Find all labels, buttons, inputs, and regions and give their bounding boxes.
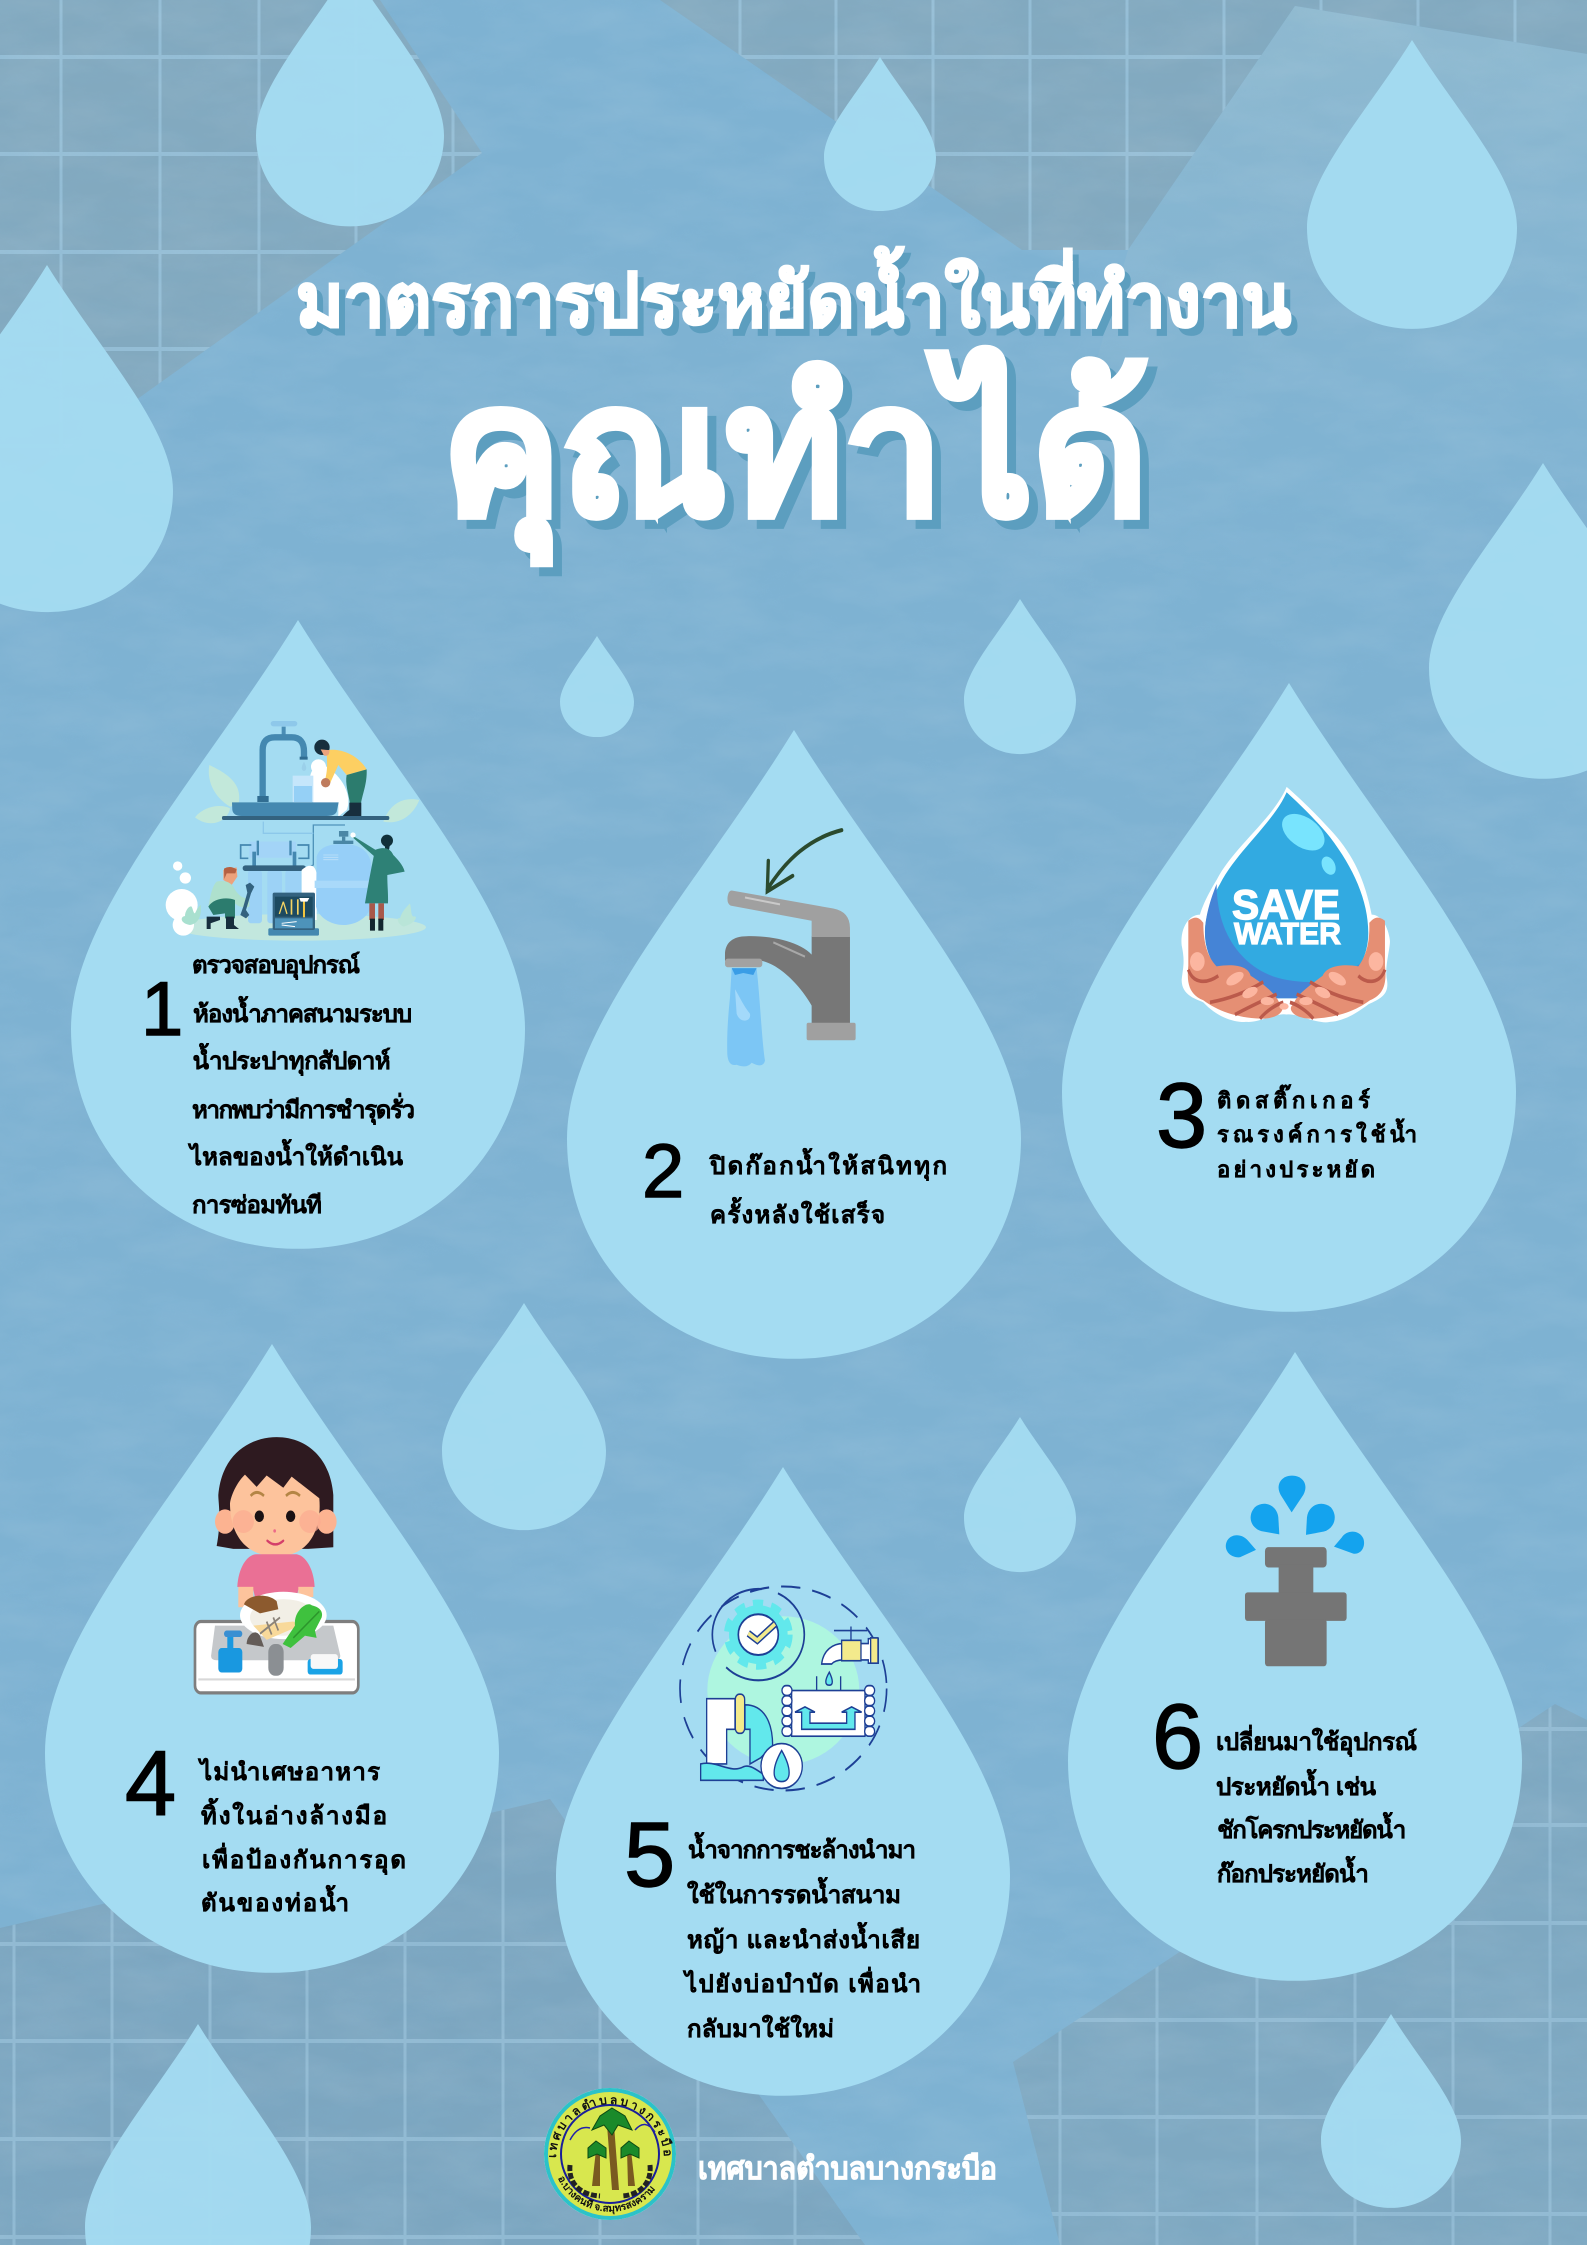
step text: เพื่อป้องกันการอุด xyxy=(202,1842,406,1876)
step text: หญ้า และนำส่งน้ำเสีย xyxy=(687,1921,920,1954)
step text: กลับมาใช้ใหม่ xyxy=(687,2014,834,2043)
icon: faucet with arrow xyxy=(725,830,856,1066)
title xyxy=(296,246,1297,573)
step text: ไปยังบ่อบำบัด เพื่อนำ xyxy=(682,1966,921,1998)
step number: 3 xyxy=(1156,1065,1207,1167)
title: คุณทำได้ xyxy=(442,348,1148,564)
step text: ติดสติ๊กเกอร์ xyxy=(1217,1084,1370,1113)
step text: ทิ้งในอ่างล้างมือ xyxy=(201,1797,387,1830)
step number: 5 xyxy=(624,1804,675,1906)
step text: ตันของท่อน้ำ xyxy=(201,1884,349,1917)
step text: น้ำจากการชะล้างนำมา xyxy=(688,1831,916,1864)
step number: 1 xyxy=(141,967,183,1052)
logo: municipality seal xyxy=(544,2060,716,2220)
step text: ประหยัดน้ำ เช่น xyxy=(1216,1768,1377,1801)
step text: รณรงค์การใช้น้ำ xyxy=(1217,1118,1417,1147)
step text: ใช้ในการรดน้ำสนาม xyxy=(687,1876,901,1909)
step text xyxy=(682,1831,921,2043)
icon: save water drop in hands: SAVE xyxy=(1232,881,1340,928)
footer organisation name: เทศบาลตำบลบางกระบือ xyxy=(698,2151,997,2186)
step text: ห้องน้ำภาคสนามระบบ xyxy=(193,995,412,1028)
step text: ครั้งหลังใช้เสร็จ xyxy=(710,1196,885,1229)
step text: ตรวจสอบอุปกรณ์ xyxy=(192,951,360,981)
panel: step 3 xyxy=(1062,683,1516,1312)
icon: girl washing dishes xyxy=(195,1437,358,1693)
step text: เปลี่ยนมาใช้อุปกรณ์ xyxy=(1216,1724,1417,1758)
panel: step 6 xyxy=(1068,1352,1522,1981)
step text xyxy=(197,1757,406,1917)
icon: save water drop in hands xyxy=(1181,787,1390,1022)
step text xyxy=(709,1147,947,1229)
icon: save water drop in hands: WATER xyxy=(1234,916,1341,951)
panel: step 5 xyxy=(556,1467,1010,2096)
logo: municipality seal: เทศบาลตำบลบางกระบือ xyxy=(549,2060,716,2198)
title: มาตรการประหยัดน้ำในที่ทำงาน xyxy=(296,246,1291,342)
panel: step 2 xyxy=(567,730,1021,1359)
step text: น้ำประปาทุกสัปดาห์ xyxy=(193,1042,391,1077)
step text: ก๊อกประหยัดน้ำ xyxy=(1217,1855,1369,1888)
step text: ชักโครกประหยัดน้ำ xyxy=(1217,1811,1406,1844)
icon: water saving sprinkler xyxy=(1226,1476,1364,1666)
icon: water recycling xyxy=(680,1586,887,1790)
step text: การซ่อมทันที xyxy=(192,1192,322,1219)
step text xyxy=(1216,1724,1417,1888)
step text xyxy=(187,951,415,1219)
step number: 6 xyxy=(1152,1686,1203,1788)
step number: 2 xyxy=(642,1129,684,1214)
icon: plumbers fixing water system xyxy=(166,721,426,941)
step text: ไหลของน้ำให้ดำเนิน xyxy=(187,1138,404,1171)
step text: ไม่นำเศษอาหาร xyxy=(197,1757,380,1786)
panel: step 1 xyxy=(71,620,525,1249)
panel: step 4 xyxy=(45,1344,499,1973)
step text xyxy=(1217,1084,1417,1182)
title: มาตรการประหยัดน้ำในที่ทำงาน xyxy=(302,253,1297,349)
step text: หากพบว่ามีการชำรุดรั่ว xyxy=(192,1092,415,1126)
step text: อย่างประหยัด xyxy=(1217,1157,1375,1182)
step number: 4 xyxy=(125,1733,176,1835)
title: คุณทำได้ xyxy=(451,357,1157,573)
logo: municipality seal: อ.บางคนที จ.สมุทรสงคราม xyxy=(558,2176,656,2214)
step text: ปิดก๊อกน้ำให้สนิททุก xyxy=(709,1147,947,1182)
